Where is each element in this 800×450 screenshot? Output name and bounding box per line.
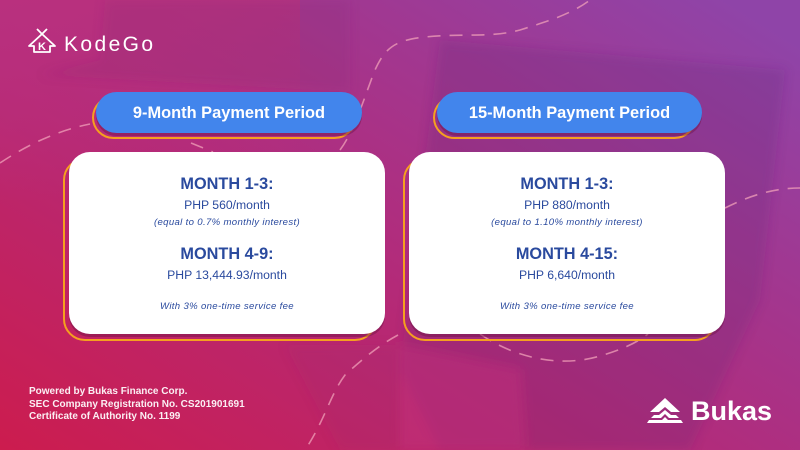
text: PHP 6,640/month: PHP 6,640/month: [519, 268, 615, 282]
card outline: 15-month: [403, 158, 717, 341]
wordmark: KodeGo: KodeGo: [64, 33, 155, 56]
text: PHP 13,444.93/month: PHP 13,444.93/month: [167, 268, 287, 282]
text: PHP 560/month: PHP 560/month: [184, 198, 270, 212]
card outline: 9-month: [63, 158, 377, 341]
icon: Bukas mark: [647, 398, 683, 423]
heading: month 1-3: MONTH 1-3:: [520, 175, 614, 193]
note: service fee: With 3% one-time service fee: [160, 301, 294, 312]
footer text: company registration: [29, 386, 245, 422]
wordmark: Bukas: Bukas: [691, 396, 772, 426]
footer text: company registration: SEC Company Registration No. CS201901691: [29, 399, 245, 410]
card: 15-month details: [409, 152, 725, 334]
note: monthly interest: (equal to 0.7% monthly interest): [154, 217, 300, 228]
heading: 9-Month Payment Period: [96, 92, 362, 133]
pill outline: 15-month heading: [433, 96, 696, 139]
card: 9-month details: [69, 152, 385, 334]
heading: month 4-15: MONTH 4-15:: [516, 245, 618, 263]
note: service fee: With 3% one-time service fee: [500, 301, 634, 312]
heading: month 1-3: MONTH 1-3:: [180, 175, 274, 193]
heading: month 4-9: MONTH 4-9:: [180, 245, 274, 263]
footer text: company registration: Powered by Bukas Finance Corp.: [29, 386, 187, 397]
icon: KodeGo house: K: [38, 41, 46, 53]
heading: 9-Month Payment Period: 9-Month Payment Period: [133, 104, 325, 122]
heading: 15-Month Payment Period: 15-Month Payment Period: [469, 104, 670, 122]
footer text: company registration: Certificate of Authority No. 1199: [29, 411, 180, 422]
note: monthly interest: (equal to 1.10% monthly interest): [491, 217, 643, 228]
panel: 9-month payment period: [63, 92, 708, 341]
panel: 15-month payment period: [403, 92, 725, 341]
Bukas logo: [647, 396, 772, 426]
icon: KodeGo house: [28, 28, 56, 53]
text: PHP 880/month: PHP 880/month: [524, 198, 610, 212]
heading: 15-Month Payment Period: [437, 92, 702, 133]
KodeGo logo: [28, 28, 155, 56]
pill outline: 9-month heading: [92, 96, 356, 139]
